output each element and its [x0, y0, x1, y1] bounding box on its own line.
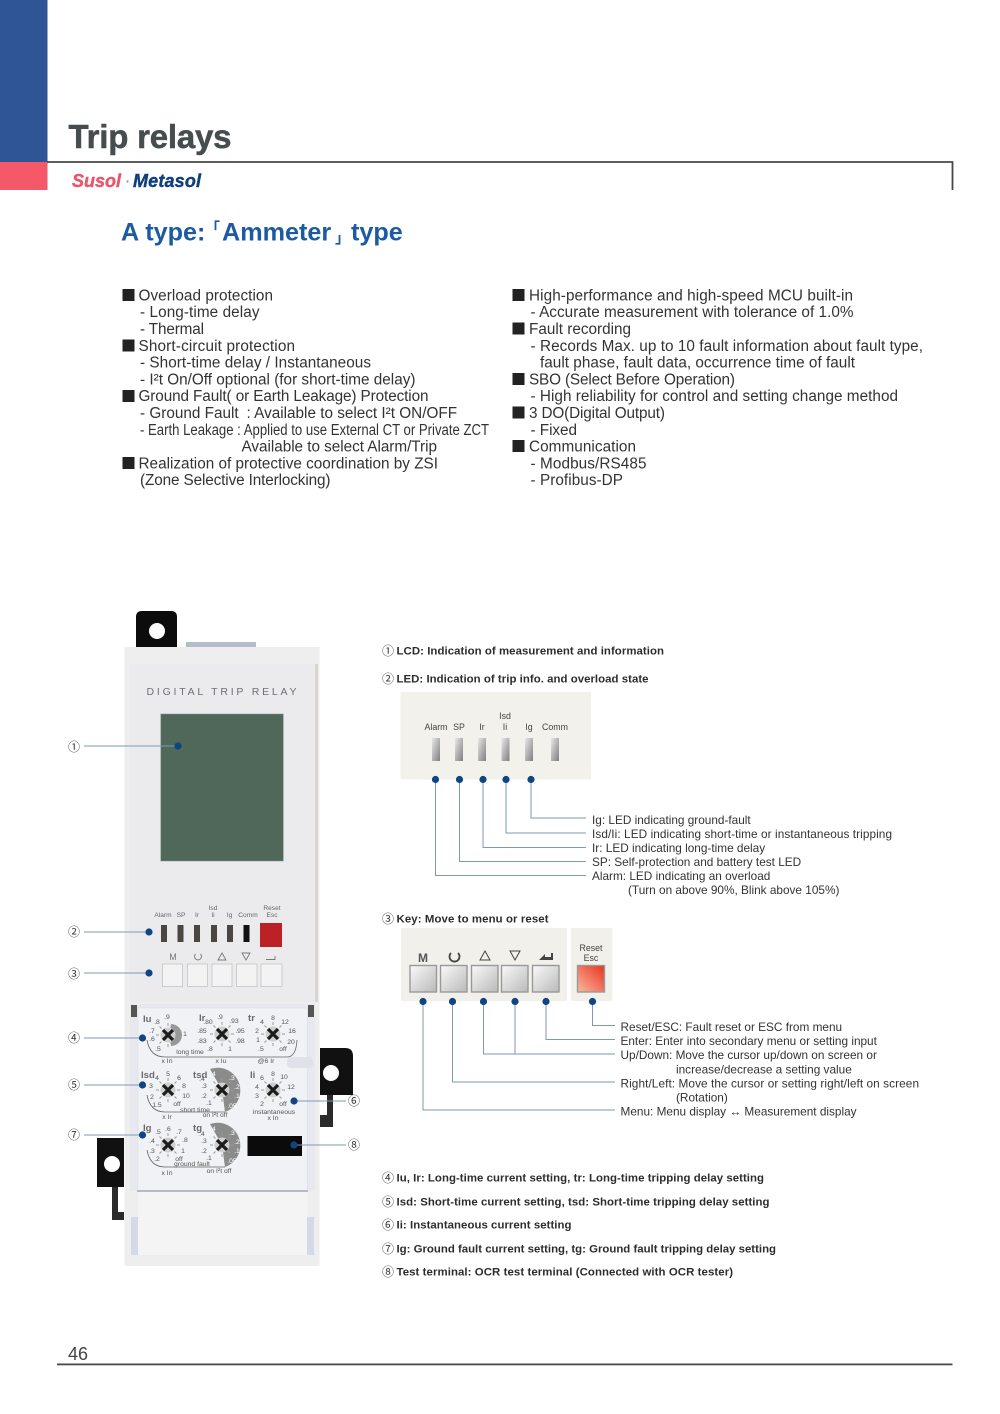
- short time dials: 1.5: [152, 1102, 162, 1109]
- left feature list: ■: [121, 284, 136, 306]
- ground fault dials: off: [175, 1156, 183, 1163]
- callout 1: ①: [68, 738, 80, 755]
- short time dials: .2: [234, 1084, 240, 1091]
- right feature list: - High reliability for control and setting change method: [530, 388, 898, 405]
- left feature list: [121, 284, 489, 489]
- short time dials: .2: [201, 1093, 207, 1100]
- long time dials: .80: [203, 1019, 213, 1026]
- ground fault dials: tg: [193, 1123, 202, 1134]
- key descriptions: [620, 1020, 919, 1118]
- left feature list: - I²t On/Off optional (for short-time delay): [140, 371, 416, 388]
- ground fault dials: .4: [149, 1138, 155, 1145]
- left feature list: - Thermal: [140, 321, 204, 338]
- ground fault dials: x In: [162, 1170, 173, 1177]
- heading 8: Test terminal: OCR test terminal (Connected with OCR tester): [396, 1266, 733, 1278]
- short time dials: .05: [227, 1103, 237, 1110]
- long time dials: .7: [149, 1028, 155, 1035]
- heading 1: LCD: LCD: Indication of measurement and information: [396, 646, 664, 658]
- device LED labels: Ir: [195, 912, 200, 919]
- footer rule: [57, 1364, 952, 1365]
- header rule: [47, 162, 952, 190]
- device reset key: [260, 923, 282, 947]
- key diagram panel: [401, 928, 612, 1001]
- right feature list: - Fixed: [530, 422, 577, 439]
- key descriptions: Up/Down: Move the cursor up/down on screen or: [620, 1048, 877, 1062]
- short time dials: .1: [206, 1100, 212, 1107]
- keys: [410, 966, 604, 992]
- LED descriptions: Ig: LED indicating ground-fault: [592, 813, 751, 827]
- right feature list: [511, 284, 923, 489]
- short time dials: 5: [166, 1071, 170, 1078]
- lower cover: [138, 1192, 308, 1255]
- left feature list: Ground Fault( or Earth Leakage) Protection: [138, 388, 428, 405]
- page number: 46: [68, 1344, 88, 1364]
- ground fault dials: .1: [206, 1155, 212, 1162]
- key descriptions: Right/Left: Move the cursor or setting right/left on screen: [620, 1076, 919, 1090]
- left feature list: - Short-time delay / Instantaneous: [140, 355, 371, 372]
- device LED labels: Alarm: [154, 912, 172, 919]
- heading 5: Isd: Short-time current setting, tsd: Short-time tripping delay setting: [396, 1196, 770, 1208]
- long time dials: .98: [235, 1038, 245, 1045]
- device LED labels: Ig: [227, 912, 233, 919]
- device LED labels: Comm: [238, 912, 258, 919]
- heading 4: ④: [382, 1169, 394, 1186]
- brand line: Metasol: [133, 171, 202, 191]
- left feature list: Realization of protective coordination by ZSI: [138, 455, 438, 472]
- left feature list: - Earth Leakage : Applied to use External CT or Private ZCT: [140, 422, 489, 439]
- key descriptions: Menu: Menu display ↔ Measurement display: [620, 1104, 857, 1118]
- brand line: [72, 171, 202, 191]
- LED descriptions: (Turn on above 90%, Blink above 105%): [628, 883, 839, 897]
- top mounting tab: [136, 611, 256, 647]
- section heading: 」: [335, 227, 350, 248]
- brand line: ·: [125, 173, 130, 189]
- long time dials: .6: [149, 1036, 155, 1043]
- right feature list: ■: [511, 318, 526, 339]
- short time dials: 10: [182, 1093, 190, 1100]
- short time dials: 2: [260, 1101, 264, 1108]
- callout 3: [68, 965, 153, 982]
- ground fault dials: .2: [234, 1139, 240, 1146]
- key symbols: M: [418, 951, 428, 965]
- callout 1: [68, 738, 182, 755]
- long time dials: [143, 1013, 297, 1065]
- LED labels: Comm: [542, 722, 568, 732]
- long time dials: 16: [288, 1028, 296, 1035]
- left feature list: Overload protection: [138, 287, 273, 304]
- long time dials: .9: [164, 1014, 170, 1021]
- left feature list: ■: [121, 335, 136, 356]
- short time dials: short time: [180, 1107, 210, 1114]
- short time dials: tsd: [193, 1070, 208, 1081]
- key symbols: Reset: [580, 943, 603, 953]
- long time dials: off: [279, 1046, 287, 1053]
- long time dials: x Iu: [216, 1058, 227, 1065]
- LED labels: Alarm: [425, 722, 447, 732]
- right mounting tab: [320, 1048, 353, 1127]
- short time dials: Ii: [250, 1070, 255, 1081]
- key symbols: [418, 943, 603, 965]
- front plate: [130, 664, 315, 1002]
- short time dials: x Ir: [162, 1114, 172, 1121]
- long time dials: 1: [228, 1046, 232, 1053]
- heading 8: ⑧: [382, 1263, 394, 1280]
- callout 8: [290, 1136, 360, 1153]
- long time dials: .95: [235, 1028, 245, 1035]
- callout 6: ⑥: [348, 1092, 360, 1109]
- right feature list: SBO (Select Before Operation): [529, 371, 735, 388]
- heading 5: ⑤: [382, 1193, 394, 1210]
- long time dials: 1: [183, 1031, 187, 1038]
- ground fault dials: .4: [210, 1126, 216, 1133]
- key descriptions: increase/decrease a setting value: [676, 1062, 852, 1076]
- right feature list: ■: [511, 368, 526, 390]
- short time dials: .4: [210, 1071, 216, 1078]
- ground fault dials: .5: [155, 1129, 161, 1136]
- left mounting tab: [97, 1138, 124, 1220]
- device keys: [162, 964, 282, 986]
- brand line: Susol: [72, 171, 122, 191]
- long time dials: @6 Ir: [258, 1058, 275, 1065]
- ground fault dials: .3: [229, 1130, 235, 1137]
- key leader lines: [419, 998, 615, 1110]
- long time dials: 8: [271, 1015, 275, 1022]
- callout 2: [68, 923, 153, 940]
- short time dials: 4: [155, 1075, 159, 1082]
- short time dials: 6: [177, 1075, 181, 1082]
- ground fault dials: on I²t off: [207, 1168, 232, 1175]
- long time dials: Iu: [143, 1014, 152, 1025]
- ground fault dials: .4: [199, 1131, 205, 1138]
- right feature list: Communication: [529, 439, 636, 456]
- heading 2: LED: ②: [382, 670, 394, 687]
- LCD screen: [161, 714, 283, 861]
- LED labels: Ii: [503, 722, 507, 732]
- heading 6: [382, 1216, 572, 1233]
- section heading: A type:: [121, 218, 205, 246]
- long time dials: 4: [260, 1019, 264, 1026]
- right feature list: - Modbus/RS485: [530, 455, 646, 472]
- short time dials: off: [279, 1101, 287, 1108]
- long time dials: x In: [162, 1058, 173, 1065]
- device heading: DIGITAL TRIP RELAY: [146, 686, 296, 698]
- right feature list: - Accurate measurement with tolerance of 1.0%: [530, 304, 854, 321]
- device photo: digital trip relay: [97, 611, 353, 1266]
- right feature list: High-performance and high-speed MCU built-in: [529, 287, 853, 304]
- heading 1: LCD: ①: [382, 642, 394, 659]
- ground fault dials: .1: [234, 1148, 240, 1155]
- LED leader lines: [432, 776, 586, 876]
- short time dials: [141, 1068, 296, 1122]
- left feature list: Short-circuit protection: [138, 338, 295, 355]
- callout 7: [68, 1126, 146, 1143]
- section heading: type: [351, 218, 403, 246]
- callout 4: ④: [68, 1029, 80, 1046]
- left feature list: ■: [121, 385, 136, 406]
- long time dials: tr: [248, 1013, 255, 1024]
- device key symbols: M: [169, 952, 177, 962]
- device LED labels: Esc: [266, 912, 278, 919]
- callout 7: ⑦: [68, 1126, 80, 1143]
- heading 7: Ig: Ground fault current setting, tg: Ground fault tripping delay setting: [396, 1244, 776, 1256]
- right feature list: 3 DO(Digital Output): [529, 405, 665, 422]
- long time dials: .93: [229, 1018, 239, 1025]
- callout 2: ②: [68, 923, 80, 940]
- heading 1: LCD: [382, 642, 664, 659]
- ground fault dials: [143, 1123, 240, 1177]
- key descriptions: Enter: Enter into secondary menu or setting input: [620, 1034, 878, 1048]
- callout 5: [68, 1076, 146, 1093]
- short time dials: .1: [234, 1093, 240, 1100]
- short time dials: 6: [260, 1075, 264, 1082]
- heading 6: ⑥: [382, 1216, 394, 1233]
- ground fault dials: .6: [165, 1126, 171, 1133]
- heading 5: [382, 1193, 770, 1210]
- LED descriptions: Isd/Ii: LED indicating short-time or instantaneous tripping: [592, 827, 892, 841]
- left feature list: (Zone Selective Interlocking): [140, 472, 330, 489]
- short time dials: 8: [271, 1071, 275, 1078]
- red corner block: [0, 162, 48, 190]
- long time dials: .8: [154, 1019, 160, 1026]
- ground fault dials: ground fault: [174, 1161, 210, 1168]
- short time dials: .4: [199, 1076, 205, 1083]
- device LEDs: [161, 925, 250, 942]
- heading 3: key: [382, 910, 549, 927]
- heading 8: [382, 1263, 733, 1280]
- ground fault dials: .05: [227, 1158, 237, 1165]
- short time dials: 12: [287, 1084, 295, 1091]
- callout 6: [290, 1092, 360, 1109]
- ground fault dials: .3: [201, 1138, 207, 1145]
- short time dials: 3: [255, 1093, 259, 1100]
- ground fault dials: .3: [149, 1148, 155, 1155]
- long time dials: .9: [217, 1014, 223, 1021]
- device LED labels: Reset: [263, 905, 281, 912]
- LED indicators: [432, 738, 559, 761]
- short time dials: x In: [268, 1115, 279, 1122]
- long time dials: .8: [207, 1046, 213, 1053]
- callout 5: ⑤: [68, 1076, 80, 1093]
- short time dials: 4: [255, 1084, 259, 1091]
- short time dials: Isd: [141, 1070, 155, 1081]
- ground fault dials: .8: [182, 1137, 188, 1144]
- right feature list: Fault recording: [529, 321, 631, 338]
- long time dials: .83: [197, 1038, 207, 1045]
- callout 8: ⑧: [348, 1136, 360, 1153]
- heading 3: key: Key: Move to menu or reset: [396, 914, 549, 926]
- section heading: 「: [205, 217, 220, 238]
- left feature list: - Ground Fault: [140, 405, 239, 422]
- LED descriptions: Ir: LED indicating long-time delay: [592, 841, 765, 855]
- short time dials: .3: [229, 1075, 235, 1082]
- device LED labels: SP: [177, 912, 186, 919]
- callout 4: [68, 1029, 146, 1046]
- LED labels: [425, 711, 568, 732]
- key symbols: Esc: [584, 953, 599, 963]
- left feature list: ■: [121, 452, 136, 474]
- LED labels: Ir: [479, 722, 485, 732]
- ground fault dials: .7: [176, 1129, 182, 1136]
- LED descriptions: SP: Self-protection and battery test LED: [592, 855, 801, 869]
- long time dials: 1: [256, 1037, 260, 1044]
- left feature list: : Available to select I²t ON/OFF: [246, 405, 457, 422]
- right feature list: ■: [511, 284, 526, 306]
- key descriptions: (Rotation): [676, 1090, 728, 1104]
- LED labels: Ig: [525, 722, 533, 732]
- long time dials: .5: [155, 1046, 161, 1053]
- relay housing: [124, 647, 320, 1266]
- LED labels: SP: [453, 722, 465, 732]
- heading 2: LED: LED: Indication of trip info. and overload state: [396, 674, 648, 686]
- section heading: [121, 217, 403, 248]
- left feature list: Available to select Alarm/Trip: [242, 439, 437, 456]
- short time dials: instantaneous: [253, 1109, 296, 1116]
- short time dials: 2: [150, 1094, 154, 1101]
- heading 2: LED: [382, 670, 648, 687]
- long time dials: .5: [258, 1046, 264, 1053]
- short time dials: off: [173, 1101, 181, 1108]
- test terminal: [248, 1136, 302, 1156]
- heading 4: Iu, Ir: Long-time current setting, tr: Long-time tripping delay setting: [396, 1172, 764, 1184]
- LED descriptions: [592, 813, 892, 897]
- LED labels: Isd: [499, 711, 511, 721]
- long time dials: 12: [281, 1019, 289, 1026]
- title: Trip relays: [68, 118, 232, 155]
- heading 4: [382, 1169, 764, 1186]
- short time dials: on I²t off: [203, 1112, 228, 1119]
- device LED labels: Isd: [209, 905, 218, 912]
- long time dials: long time: [176, 1049, 204, 1056]
- ground fault dials: .2: [201, 1148, 207, 1155]
- heading 6: Ii: Instantaneous current setting: [396, 1220, 572, 1232]
- long time dials: 2: [255, 1028, 259, 1035]
- device LED labels: Ii: [211, 912, 215, 919]
- short time dials: 10: [280, 1074, 288, 1081]
- device key symbols: [169, 952, 275, 962]
- heading 7: [382, 1240, 776, 1257]
- ground fault dials: .2: [154, 1156, 160, 1163]
- right feature list: ■: [511, 436, 526, 457]
- heading 3: key: ③: [382, 910, 394, 927]
- short time dials: 8: [182, 1083, 186, 1090]
- long time dials: 20: [287, 1039, 295, 1046]
- short time dials: 3: [149, 1083, 153, 1090]
- right feature list: - Records Max. up to 10 fault information about fault type,: [530, 338, 923, 355]
- key descriptions: Reset/ESC: Fault reset or ESC from menu: [620, 1020, 842, 1034]
- left feature list: - Long-time delay: [140, 304, 260, 321]
- heading 7: ⑦: [382, 1240, 394, 1257]
- long time dials: Ir: [199, 1013, 206, 1024]
- ground fault dials: 1: [181, 1148, 185, 1155]
- right feature list: fault phase, fault data, occurrence time of fault: [540, 355, 856, 372]
- short time dials: .3: [201, 1083, 207, 1090]
- blue corner block: [0, 0, 48, 162]
- callout 3: ③: [68, 965, 80, 982]
- section heading: Ammeter: [222, 218, 331, 246]
- right feature list: ■: [511, 402, 526, 423]
- ground fault dials: Ig: [143, 1123, 152, 1134]
- right feature list: - Profibus-DP: [530, 472, 623, 489]
- LED diagram panel: [400, 692, 591, 780]
- long time dials: .85: [197, 1028, 207, 1035]
- LED descriptions: Alarm: LED indicating an overload: [592, 869, 770, 883]
- device LED labels: [154, 905, 281, 919]
- lower setting plate: [130, 1004, 315, 1191]
